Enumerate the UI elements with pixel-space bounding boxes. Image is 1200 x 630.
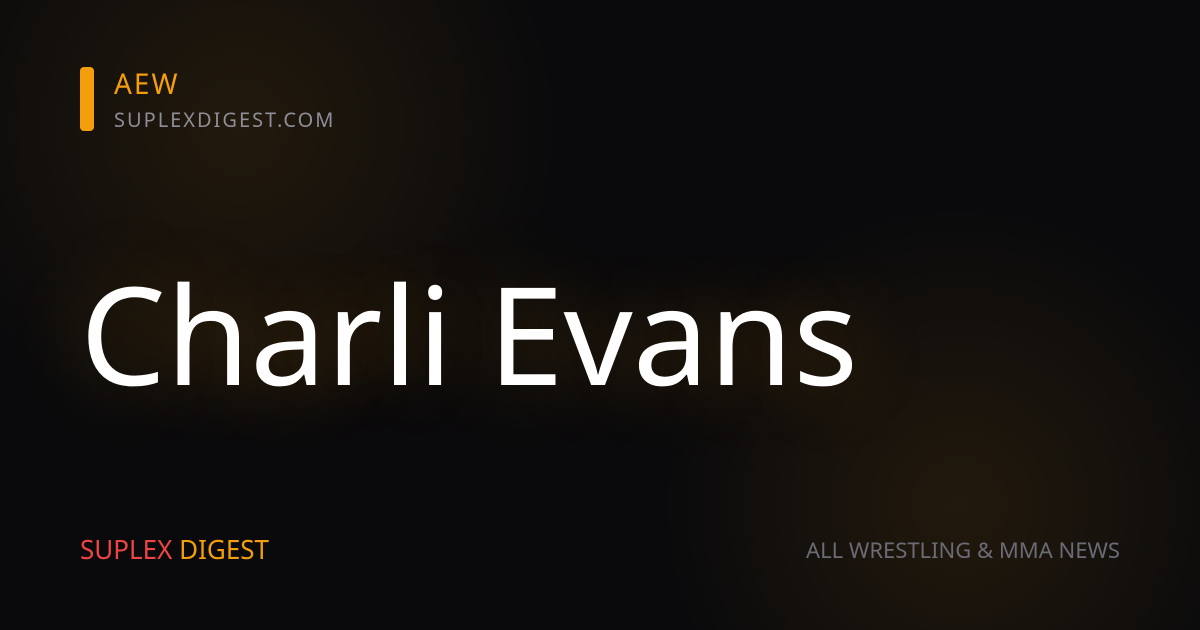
brand name: SUPLEX DIGEST bbox=[80, 531, 269, 567]
title: Charli Evans bbox=[80, 240, 858, 425]
site domain: SUPLEXDIGEST.COM bbox=[114, 106, 335, 133]
accent bar bbox=[80, 67, 94, 131]
category label: AEW bbox=[114, 65, 180, 103]
tagline: ALL WRESTLING & MMA NEWS bbox=[806, 535, 1120, 565]
